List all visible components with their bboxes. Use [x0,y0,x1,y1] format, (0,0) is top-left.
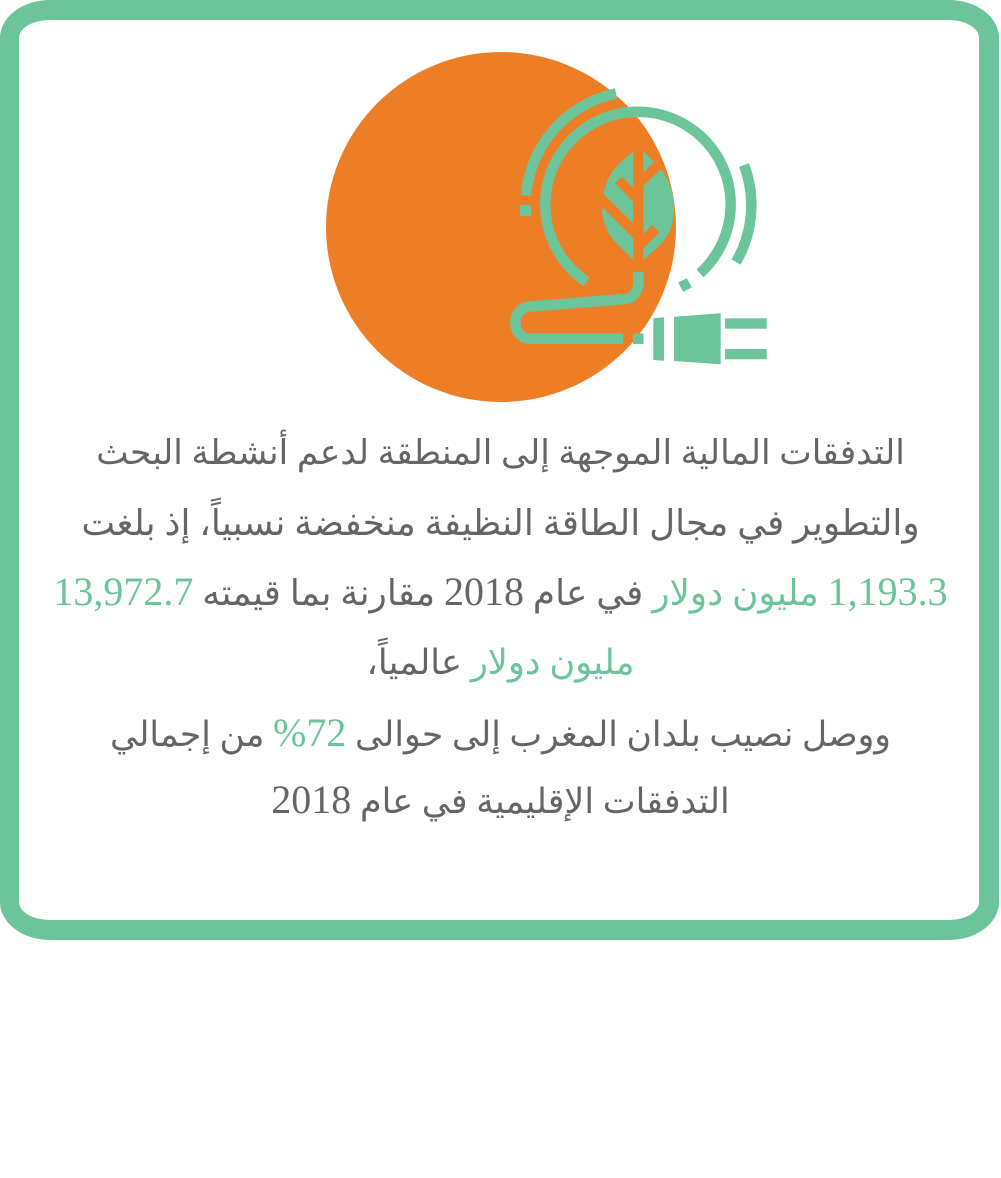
text block: body paragraph [53,430,948,822]
line 2: والتطوير في مجال الطاقة النظيفة منخفضة نسبياً، إذ بلغت [81,503,920,543]
panel: rounded green frame [0,0,999,940]
line 3: 1,193.3 مليون دولار في عام 2018 مقارنة بما قيمته 13,972.7 [53,569,948,614]
ring of the bulb [545,112,731,282]
outer right arc [736,165,751,262]
line 4: مليون دولار عالمياً، [367,643,634,682]
line 5: ووصل نصيب بلدان المغرب إلى حوالى 72% من إجمالي [110,710,891,755]
icon: bulb-shaped cable [515,94,751,339]
outer left arc [526,94,616,196]
cable [515,272,638,339]
outer left dot [520,205,531,216]
line 1: التدفقات المالية الموجهة إلى المنطقة لدعم أنشطة البحث [96,434,905,472]
ring dash [681,283,689,287]
orange circle [326,52,676,402]
line 6: التدفقات الإقليمية في عام 2018 [271,777,730,822]
cable dot [633,333,644,344]
icon: leaf [602,151,674,260]
icon: plug [653,313,767,364]
icon: orange circle with clean energy plug and leaf [326,52,767,402]
